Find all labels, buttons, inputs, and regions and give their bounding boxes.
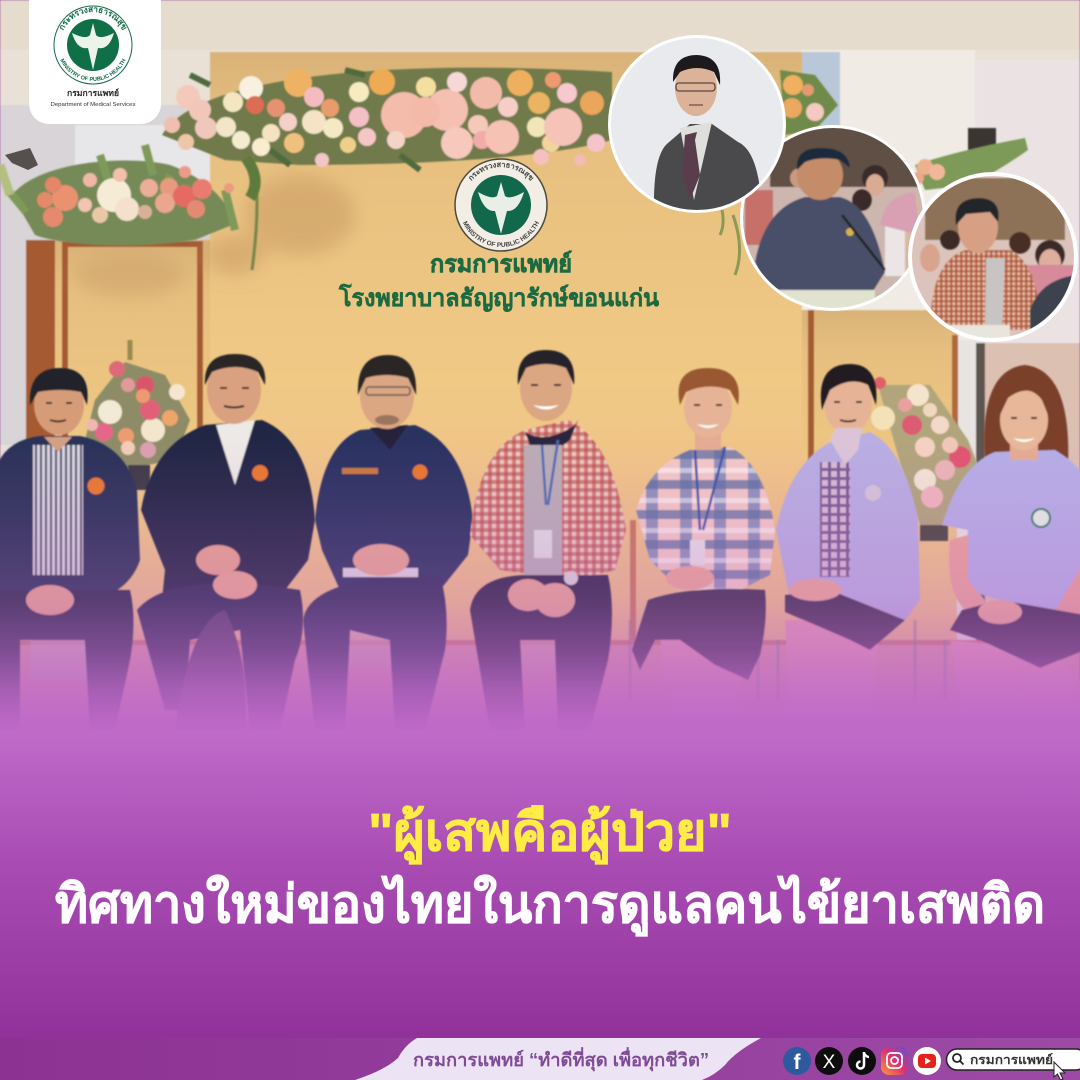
- wall sign: ministry emblem: กระทรวงสาธารณสุข: [469, 162, 534, 181]
- garland: right of portrait: [780, 70, 838, 135]
- garland: left flowers: [0, 145, 235, 245]
- logo card: กรมการแพทย์: [67, 88, 119, 98]
- person 4: man in plaid red jacket: [470, 350, 626, 730]
- logo card: กระทรวงสาธารณสุข: [60, 6, 127, 30]
- person 3: man in navy jacket with glasses: [303, 355, 473, 730]
- logo card: [29, 0, 161, 124]
- leaf shadows on backdrop: [75, 175, 355, 297]
- photo background: room and backdrop: [0, 0, 1080, 760]
- inset photo: portrait in suit: [608, 35, 786, 215]
- wall sign: ministry emblem: MINISTRY OF PUBLIC HEALTH: [463, 220, 539, 247]
- search pill: [946, 1049, 1080, 1070]
- wall sign: department name: กรมการแพทย์: [430, 250, 572, 278]
- purple lower panel: [0, 739, 1080, 1080]
- icon: instagram: [881, 1047, 908, 1075]
- footer slogan banner: [355, 1038, 761, 1080]
- person 1: man in navy jacket: [0, 368, 140, 730]
- person 2: man in black jacket: [137, 354, 315, 730]
- icon: facebook: f: [794, 1051, 802, 1074]
- garland: right wall with lamp: [912, 128, 1028, 190]
- icon: youtube: [913, 1047, 941, 1075]
- ivy strand beside portrait: [720, 210, 740, 275]
- inset photo: man in plaid jacket: [908, 172, 1078, 342]
- headline: white subtitle: ทิศทางใหม่ของไทยในการดูแลคนไข้ยาเสพติด: [55, 874, 1045, 937]
- flower arrangement: right: [871, 377, 980, 541]
- headline: quoted yellow: "ผู้เสพคือผู้ป่วย": [368, 804, 732, 865]
- purple photo fade: [0, 440, 1080, 740]
- icon: X: X: [823, 1052, 836, 1073]
- person 5: woman in plaid blouse: [632, 368, 775, 730]
- logo card: MINISTRY OF PUBLIC HEALTH: [60, 58, 126, 81]
- lamp left: [5, 148, 38, 170]
- footer band: [0, 1038, 1080, 1080]
- person 7: woman in lavender shirt: [942, 365, 1080, 730]
- flower arrangement: left: [85, 340, 190, 490]
- icon: X: [815, 1047, 843, 1075]
- wall sign: ministry emblem: [454, 158, 548, 252]
- logo card: Department of Medical Services: [50, 102, 136, 108]
- icon: facebook: [783, 1047, 811, 1075]
- wall sign: hospital name: โรงพยาบาลธัญญารักษ์ขอนแก่น: [338, 283, 660, 312]
- person 6: woman in lavender jacket: [776, 364, 920, 730]
- inset photo: speaker at meeting: [740, 120, 930, 315]
- icon: cursor: [1054, 1062, 1065, 1080]
- garland: top flowers: [162, 68, 612, 270]
- chairs row: [30, 620, 945, 700]
- footer slogan text: กรมการแพทย์ “ทำดีที่สุด เพื่อทุกชีวิต”: [413, 1047, 709, 1072]
- search pill: กรมการแพทย์: [970, 1053, 1053, 1067]
- icon: tiktok: [848, 1047, 876, 1075]
